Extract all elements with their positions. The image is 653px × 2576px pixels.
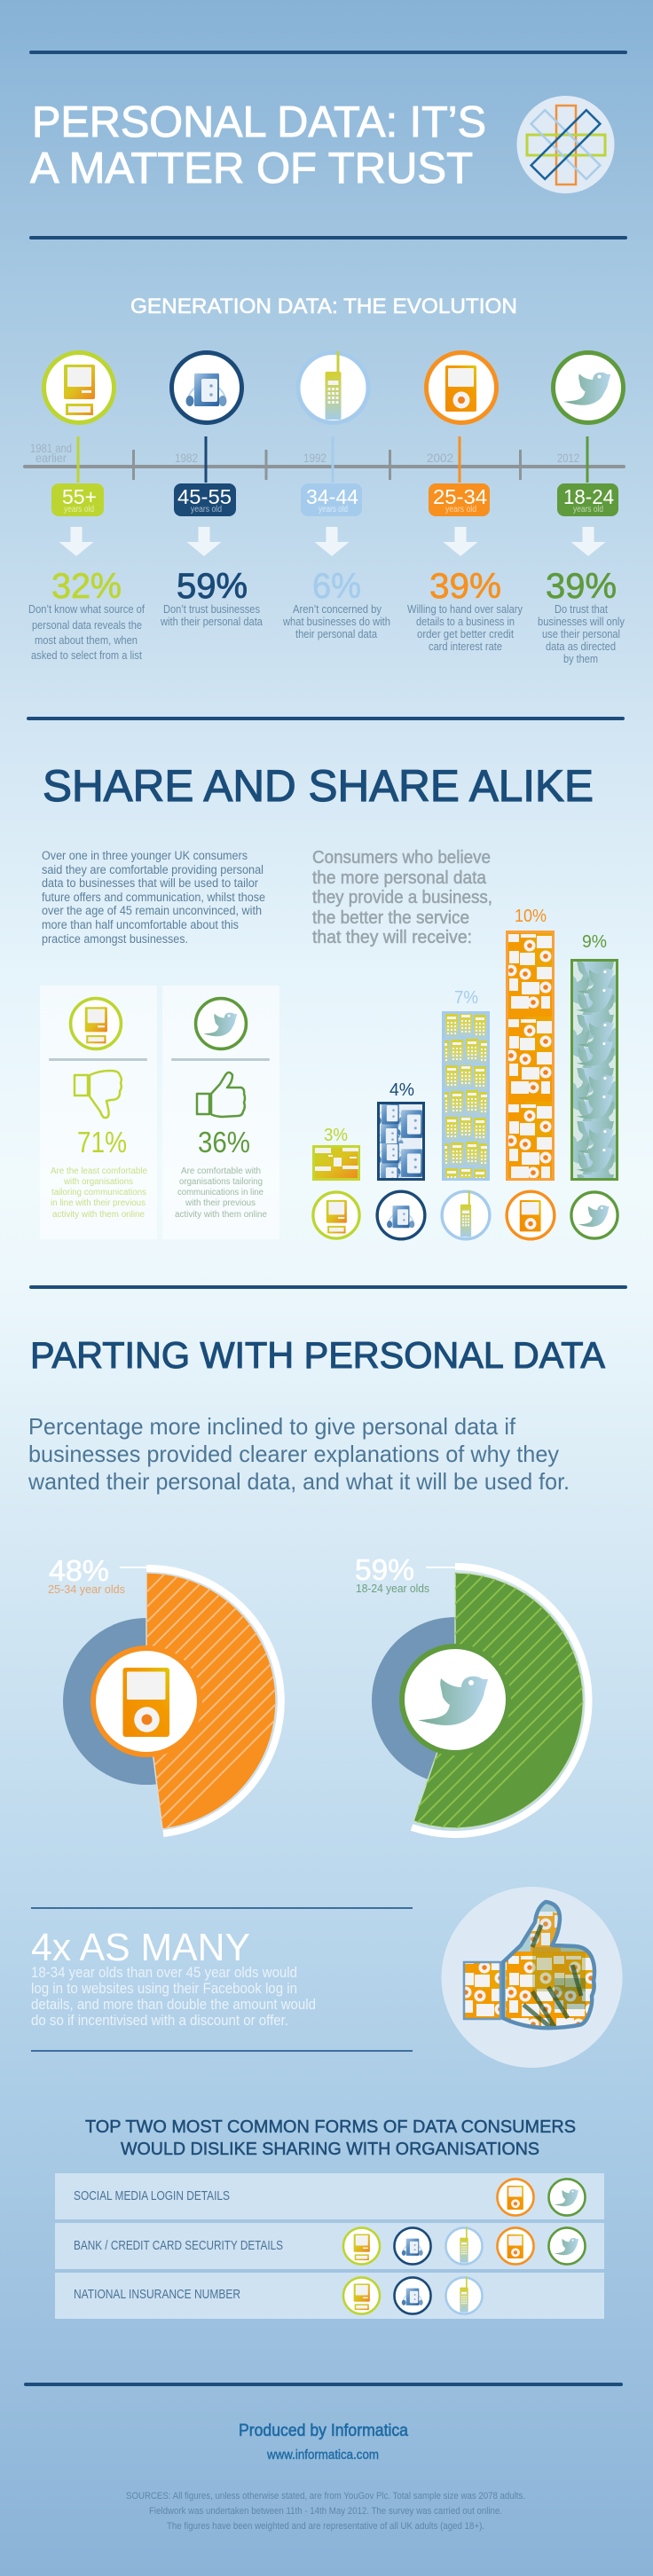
producer credit <box>239 2422 408 2462</box>
timeline: 1992 <box>303 451 326 465</box>
intro paragraph: more than half uncomfortable about this <box>42 918 239 931</box>
stat: 36%: 36% <box>198 1126 250 1158</box>
panel text: in line with their previous <box>51 1198 146 1208</box>
stat: 39% green <box>538 567 625 665</box>
icon: thumb up <box>197 1072 245 1117</box>
generation icons <box>44 351 623 422</box>
stat: 32%: asked to select from a list <box>31 649 142 662</box>
intro paragraph: future offers and communication, whilst those <box>42 891 265 904</box>
sources: The figures have been weighted and are representative of all UK adults (aged 18+). <box>167 2521 484 2532</box>
heading: top two forms of data: WOULD DISLIKE SHARING WITH ORGANISATIONS <box>121 2140 539 2159</box>
title: PERSONAL DATA: IT’S <box>32 98 486 146</box>
bar: 3% <box>312 1126 360 1238</box>
heading: top two forms of data: TOP TWO MOST COMMON FORMS OF DATA CONSUMERS <box>85 2117 576 2137</box>
age badge: 18-24 <box>557 483 618 516</box>
stat: 32%: most about them, when <box>35 634 138 647</box>
panel: comfortable <box>162 986 279 1239</box>
age badge: 18-24: 18-24 <box>563 485 614 508</box>
stat: 6%: what businesses do with <box>282 616 390 628</box>
age badge: 34-44 <box>301 483 362 516</box>
bar: 4% <box>377 1080 425 1239</box>
table row: national insurance <box>55 2273 604 2319</box>
chart heading: they provide a business, <box>312 888 492 907</box>
icon: bird <box>418 1677 488 1725</box>
stat: 32% <box>28 567 145 662</box>
chart: 48% pie <box>48 1559 285 1837</box>
bar: 9%: 9% <box>582 932 607 952</box>
table row: bank details: BANK / CREDIT CARD SECURITY DETAILS <box>74 2239 283 2253</box>
divider <box>24 2383 623 2386</box>
icon: trust logo <box>516 96 614 193</box>
timeline: 1982 <box>175 451 198 465</box>
bar: 7%: 7% <box>454 988 478 1008</box>
age badge: 25-34: 25-34 <box>433 485 487 508</box>
icon: computer <box>71 999 121 1048</box>
title <box>30 98 486 192</box>
bar: 9% <box>571 932 618 1238</box>
age badge: 25-34: years old <box>445 505 476 514</box>
sources: SOURCES: All figures, unless otherwise stated, are from YouGov Plc. Total sample size was 2078 adults. <box>126 2491 525 2501</box>
age badge: 18-24: years old <box>573 505 603 514</box>
timeline: 2012 <box>557 451 579 465</box>
stat: 32%: 32% <box>51 567 122 606</box>
age badge: 55+: 55+ <box>62 485 97 508</box>
label: 59% <box>355 1553 429 1595</box>
heading: top two forms of data <box>85 2117 576 2159</box>
stat: 6%: their personal data <box>295 628 377 640</box>
intro paragraph <box>42 849 265 946</box>
chart heading: that they will receive: <box>312 928 472 947</box>
age badge: 55+: years old <box>64 505 94 514</box>
chart heading: the more personal data <box>312 868 487 888</box>
age badge: 45-55: years old <box>191 505 222 514</box>
age badge: 34-44: 34-44 <box>306 485 358 508</box>
callout: 4x as many: details, and more than double the amount would <box>31 1996 316 2013</box>
callout: 4x as many: log in to websites using their Facebook log in <box>31 1980 297 1997</box>
bar chart <box>312 907 618 1239</box>
stat: 39% green: businesses will only <box>538 616 625 628</box>
panel text: with their previous <box>185 1198 256 1208</box>
intro paragraph: over the age of 45 remain unconvinced, with <box>42 904 262 917</box>
chart heading <box>312 848 492 947</box>
label: 59%: 59% <box>355 1553 414 1586</box>
label: 59%: 18-24 year olds <box>356 1582 429 1595</box>
stat: 39% orange <box>407 567 523 653</box>
divider <box>29 236 627 240</box>
panel text <box>51 1166 147 1220</box>
panel text: organisations tailoring <box>179 1177 263 1187</box>
stat: 39% green: data as directed <box>546 640 616 653</box>
callout: 4x as many: 18-34 year olds than over 45 year olds would <box>31 1964 297 1981</box>
label: 48%: 25-34 year olds <box>48 1583 125 1596</box>
divider <box>29 1285 627 1289</box>
label: 48% <box>48 1554 125 1596</box>
timeline <box>23 436 625 483</box>
stat: 59%: Don’t trust businesses <box>163 603 260 616</box>
stat: 6%: Aren’t concerned by <box>293 603 382 616</box>
panel text <box>175 1166 267 1220</box>
arrows <box>59 527 605 556</box>
panel text: Are the least comfortable <box>51 1166 147 1176</box>
table row: bank details <box>55 2223 604 2269</box>
stat: 6%: 6% <box>312 567 361 606</box>
intro text: Percentage more inclined to give personal data if <box>28 1413 516 1440</box>
panel text: activity with them online <box>52 1210 145 1220</box>
stat: 6% <box>282 567 390 640</box>
stat: 59% <box>160 567 263 628</box>
age badge: 45-55 <box>174 483 236 516</box>
icon: collage thumbs up <box>442 1887 623 2068</box>
stat: 32%: Don’t know what source of <box>28 603 145 616</box>
callout: 4x as many <box>31 1907 413 2052</box>
stat: 71%: 71% <box>77 1126 127 1158</box>
age badge: 25-34 <box>429 483 490 516</box>
age badge: 45-55: 45-55 <box>177 485 232 508</box>
stat: 32%: personal data reveals the <box>32 619 142 632</box>
intro paragraph: Over one in three younger UK consumers <box>42 849 248 862</box>
table row: national insurance: NATIONAL INSURANCE NUMBER <box>74 2288 240 2302</box>
stat: 39% green: 39% <box>546 567 617 606</box>
panel text: Are comfortable with <box>181 1166 261 1176</box>
callout: 4x as many: 4x AS MANY <box>31 1926 250 1969</box>
age badge: 34-44: years old <box>319 505 348 514</box>
stat: 39% green: Do trust that <box>555 603 608 616</box>
intro text: wanted their personal data, and what it will be used for. <box>28 1468 570 1495</box>
panel: least comfortable <box>40 986 157 1239</box>
timeline: earlier <box>35 451 67 465</box>
panel text: tailoring communications <box>51 1188 146 1198</box>
sources: Fieldwork was undertaken between 11th - 14th May 2012. The survey was carried out online. <box>149 2506 502 2517</box>
icon: music player <box>122 1668 169 1737</box>
timeline: 1981 and <box>30 441 72 455</box>
panel text: with organisations <box>63 1177 133 1187</box>
icon: bird <box>196 999 246 1048</box>
callout: 4x as many: do so if incentivised with a discount or offer. <box>31 2012 288 2029</box>
icon: thumb down <box>75 1071 122 1118</box>
stat: 39% orange: Willing to hand over salary <box>407 603 523 616</box>
intro paragraph: said they are comfortable providing personal <box>42 863 264 876</box>
heading: generation data: GENERATION DATA: THE EVOLUTION <box>130 295 517 318</box>
bar: 10%: 10% <box>515 907 547 926</box>
sources <box>126 2491 525 2532</box>
bar: 4%: 4% <box>389 1080 414 1100</box>
panel text: activity with them online <box>175 1210 267 1220</box>
stat: 39% orange: 39% <box>429 567 501 606</box>
bar: 10% <box>507 907 555 1239</box>
chart heading: Consumers who believe <box>312 848 491 868</box>
table row: social media: SOCIAL MEDIA LOGIN DETAILS <box>74 2189 230 2203</box>
divider <box>27 717 625 720</box>
stat: 59%: with their personal data <box>160 616 263 628</box>
stat: 39% orange: details to a business in <box>416 616 515 628</box>
producer credit: www.informatica.com <box>266 2447 379 2462</box>
table row: social media <box>55 2173 604 2219</box>
stat: 39% orange: card interest rate <box>429 640 502 653</box>
heading: parting with personal data: PARTING WITH PERSONAL DATA <box>30 1334 605 1376</box>
chart heading: the better the service <box>312 908 469 928</box>
age badge: 55+ <box>51 483 104 516</box>
intro paragraph: data to businesses that will be used to tailor <box>42 876 258 890</box>
intro paragraph: practice amongst businesses. <box>42 932 188 946</box>
bar: 7% <box>442 988 490 1239</box>
stat: 39% orange: order get better credit <box>417 628 514 640</box>
intro text: businesses provided clearer explanations of why they <box>28 1441 559 1467</box>
stat: 39% green: use their personal <box>542 628 620 640</box>
divider <box>29 51 627 54</box>
timeline: 2002 <box>427 451 453 465</box>
bar: 3%: 3% <box>324 1126 348 1145</box>
label: 48%: 48% <box>49 1554 109 1587</box>
title: A MATTER OF TRUST <box>30 145 473 192</box>
chart: 59% pie <box>356 1559 593 1838</box>
stat: 59%: 59% <box>177 567 248 606</box>
heading: share and share alike: SHARE AND SHARE ALIKE <box>43 761 594 811</box>
panel text: communications in line <box>177 1188 264 1198</box>
producer credit: Produced by Informatica <box>239 2422 408 2440</box>
stat: 39% green: by them <box>563 653 598 665</box>
intro text <box>28 1413 570 1495</box>
